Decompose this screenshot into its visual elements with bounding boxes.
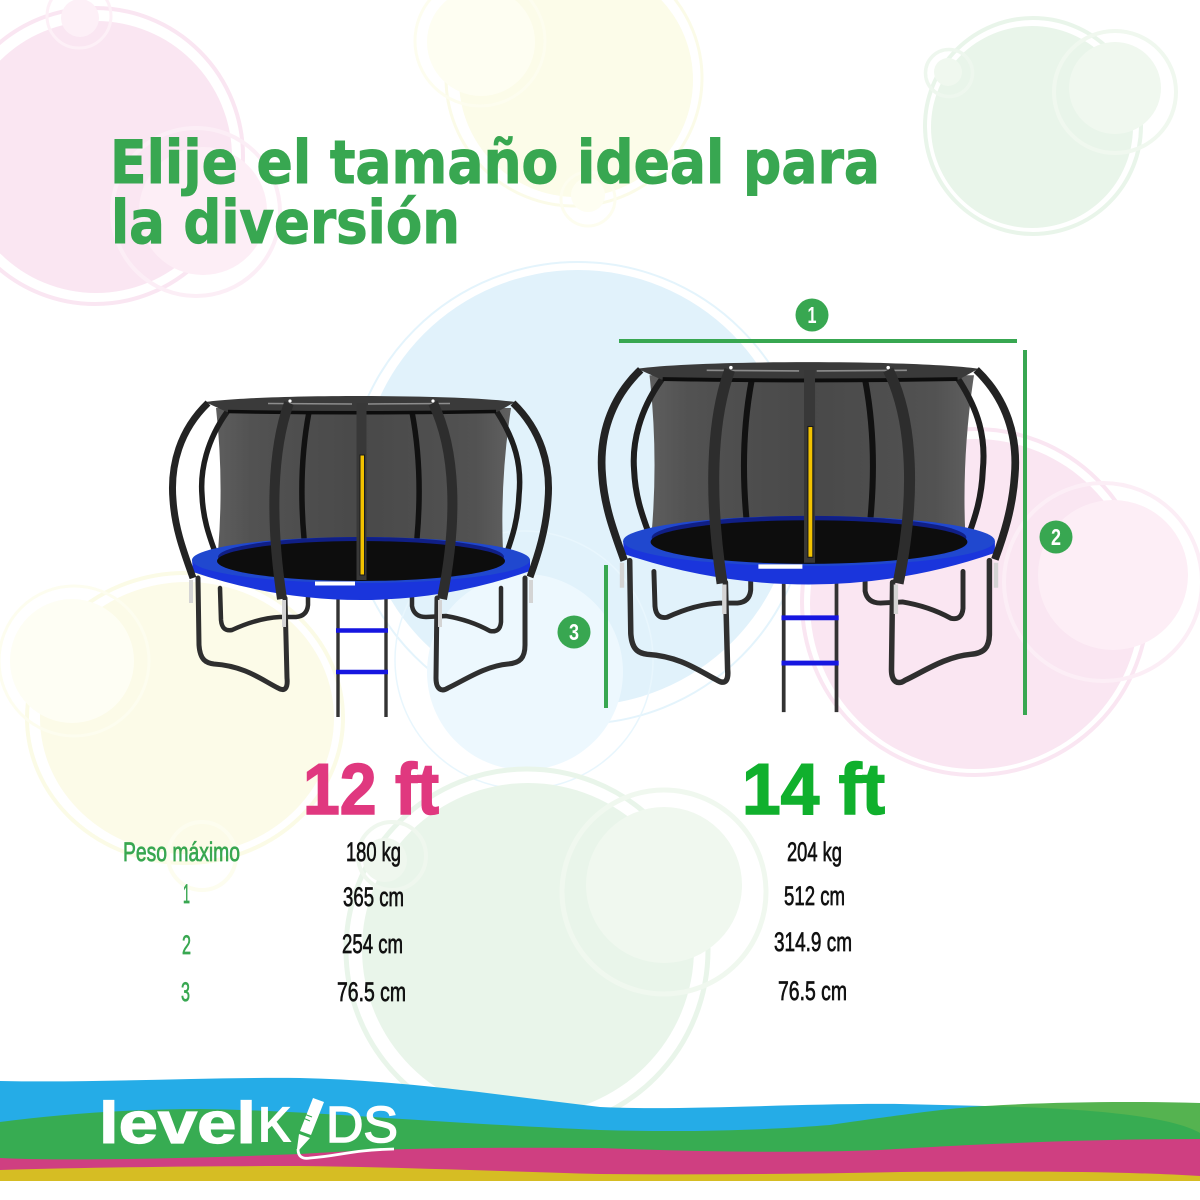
heading: 12 ft: 12 ft <box>303 750 439 830</box>
spec labels column <box>123 837 240 1007</box>
spec values 12 ft: 180 kg <box>346 837 401 867</box>
trampoline 14 ft <box>602 362 1015 712</box>
logo: levelKIDS: K <box>258 1096 292 1153</box>
spec values 12 ft <box>337 837 406 1007</box>
spec values 14 ft: 76.5 cm <box>778 976 847 1006</box>
footer wave bands <box>0 1078 1200 1181</box>
spec labels column: 3 <box>181 977 190 1007</box>
dimension 2: height line and badge: 2 <box>1051 524 1061 550</box>
trampoline 12 ft <box>172 396 549 717</box>
bubble: yellow top <box>415 0 702 226</box>
spec values 14 ft: 512 cm <box>784 881 845 911</box>
spec values 12 ft: 365 cm <box>343 882 404 912</box>
heading: 14 ft: 14 ft <box>742 750 885 830</box>
spec values 14 ft <box>774 837 852 1006</box>
dimension 1: width line and badge: 1 <box>808 302 817 328</box>
spec values 14 ft: 314.9 cm <box>774 927 852 957</box>
spec labels column: 1 <box>183 879 190 909</box>
logo: levelKIDS <box>99 1091 398 1158</box>
title: la diversión <box>111 188 460 258</box>
spec labels column: 2 <box>182 930 191 960</box>
dimension 1: width line and badge <box>619 298 1017 343</box>
dimension 3: leg height line and badge <box>558 565 608 708</box>
bubble: pink top left <box>0 0 280 304</box>
spec values 12 ft: 254 cm <box>342 929 403 959</box>
bubble: yellow bottom left <box>0 573 343 890</box>
logo: levelKIDS: DS <box>326 1096 398 1153</box>
bubble: green top right <box>925 18 1176 234</box>
spec labels column: Peso máximo <box>123 837 240 867</box>
title <box>110 128 880 258</box>
dimension 2: height line and badge <box>1023 350 1072 715</box>
dimension 3: leg height line and badge: 3 <box>569 619 579 645</box>
title: Elije el tamaño ideal para <box>110 128 880 198</box>
spec values 12 ft: 76.5 cm <box>337 977 406 1007</box>
bubble: blue centre <box>347 262 809 789</box>
bubble: green bottom <box>346 769 766 1131</box>
logo: levelKIDS: level <box>99 1091 256 1156</box>
spec values 14 ft: 204 kg <box>787 837 842 867</box>
bubble: pink bottom right <box>802 429 1200 775</box>
